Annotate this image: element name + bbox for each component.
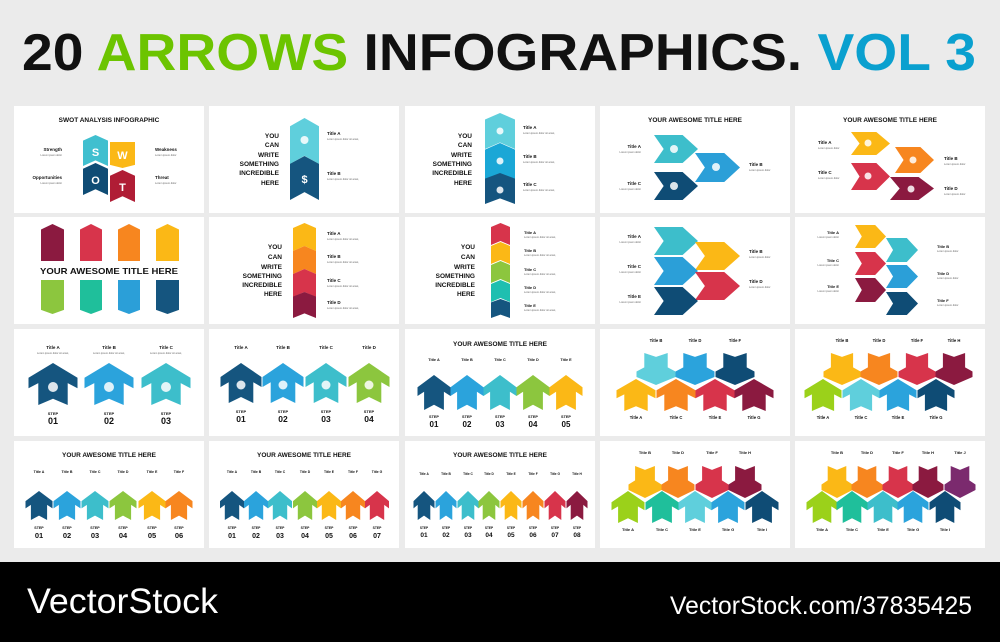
panel: three right arrows: Title B	[749, 162, 763, 167]
panel: eight steps: 07	[551, 532, 559, 539]
panel: zigzag ten: Title I	[940, 527, 950, 532]
panel: five steps: 05	[562, 420, 571, 429]
panel: two vertical arrows: Lorem ipsum dolor sit amet,	[327, 137, 359, 141]
panel: four right arrows: Title A	[818, 140, 832, 145]
panel: five steps: 02	[463, 420, 472, 429]
panel: SWOT: Threat	[155, 175, 169, 180]
panel: five steps: STEP	[429, 415, 439, 419]
panel: five right arrows: Title D	[749, 279, 763, 284]
panel: five right arrows	[600, 217, 790, 324]
panel: five vertical chevrons: Lorem ipsum dolor sit amet,	[524, 308, 556, 312]
panel: zigzag nine: Title B	[639, 450, 651, 455]
panel: three right arrows: Title C	[627, 181, 642, 186]
panel: five vertical chevrons: Title E	[524, 303, 536, 308]
panel: five vertical chevrons: YOU	[461, 244, 475, 251]
panel: seven steps: Title F	[348, 470, 358, 474]
panel: zigzag seven: Title B	[650, 338, 662, 343]
panel: seven steps: STEP	[373, 526, 382, 530]
footer logo: VectorStock	[27, 582, 219, 621]
panel: three right arrows: Title A	[627, 144, 642, 149]
panel: four steps: 02	[278, 414, 288, 424]
panel: five vertical chevrons: Lorem ipsum dolor sit amet,	[524, 235, 556, 239]
panel: four steps: STEP	[364, 409, 375, 414]
panel: three right arrows: Lorem ipsum dolor	[620, 150, 641, 154]
panel: five right arrows: Lorem ipsum dolor	[749, 285, 771, 289]
panel: five steps: STEP	[495, 415, 505, 419]
panel: five vertical chevrons: Lorem ipsum dolor sit amet,	[524, 290, 556, 294]
panel: zigzag eight: Title C	[855, 415, 867, 420]
panel: three vertical arrows: Lorem ipsum dolor sit amet,	[523, 131, 555, 135]
panel: six steps	[14, 441, 204, 548]
panel: eight steps: STEP	[551, 526, 560, 530]
panel: four right arrows: YOUR AWESOME TITLE HERE	[843, 117, 938, 124]
panel: zigzag ten: Title H	[922, 450, 934, 455]
panel: seven steps: STEP	[301, 526, 310, 530]
panel: zigzag nine: Title C	[656, 527, 668, 532]
panel: four right arrows: Title B	[944, 156, 958, 161]
panel: three steps: 02	[104, 416, 114, 426]
panel: zigzag nine: Title H	[739, 450, 751, 455]
panel: four vertical chevrons: HERE	[264, 291, 283, 298]
panel: seven steps: 03	[276, 533, 284, 540]
panel: eight steps: 05	[507, 532, 515, 539]
panel: SWOT: Lorem ipsum dolor	[155, 153, 177, 157]
panel: eight steps: Title C	[463, 472, 474, 476]
panel: five steps: 01	[430, 420, 439, 429]
panel: two vertical arrows: Title B	[327, 171, 341, 176]
panel: three vertical arrows: Lorem ipsum dolor sit amet,	[523, 160, 555, 164]
panel: five vertical chevrons	[405, 217, 595, 324]
panel: three vertical arrows	[405, 106, 595, 213]
panel: six right arrows: Lorem ipsum dolor	[937, 303, 959, 307]
panel: seven steps: 05	[325, 533, 333, 540]
panel: six steps: STEP	[62, 526, 72, 530]
panel: eight steps: 01	[420, 532, 428, 539]
panel: SWOT: Lorem ipsum dolor	[41, 153, 62, 157]
panel: six steps: YOUR AWESOME TITLE HERE	[62, 452, 157, 459]
panel: four right arrows: Lorem ipsum dolor	[944, 192, 966, 196]
panel: zigzag ten: Title A	[816, 527, 828, 532]
panel: six steps: Title F	[174, 470, 185, 474]
title: 20 ARROWS INFOGRAPHICS. VOL 3	[22, 24, 976, 82]
panel: zigzag seven: Title C	[670, 415, 682, 420]
panel: seven steps: Title B	[251, 470, 262, 474]
panel: four right arrows	[795, 106, 985, 213]
panel: zigzag ten: Title C	[846, 527, 858, 532]
panel: six steps: 02	[63, 531, 71, 540]
panel: zigzag ten: Title G	[907, 527, 919, 532]
panel: seven steps: STEP	[349, 526, 358, 530]
panel: three steps: STEP	[48, 411, 59, 416]
panel: five vertical chevrons: Title D	[524, 285, 536, 290]
panel: four steps: STEP	[321, 409, 332, 414]
panel: zigzag eight: Title E	[892, 415, 904, 420]
panel: two vertical arrows: Title A	[327, 131, 341, 136]
panel: zigzag nine: Title E	[689, 527, 701, 532]
panel: eight steps: Title B	[441, 472, 452, 476]
panel: SWOT: W	[117, 150, 128, 162]
panel: eight steps	[405, 441, 595, 548]
panel: five steps: STEP	[462, 415, 472, 419]
panel: four steps: STEP	[236, 409, 247, 414]
panel: zigzag eight: Title A	[817, 415, 829, 420]
panel: zigzag eight: Title D	[873, 338, 885, 343]
panel: four right arrows: Lorem ipsum dolor	[818, 176, 840, 180]
panel: eight steps: STEP	[529, 526, 538, 530]
panel: three vertical arrows: SOMETHING	[433, 161, 472, 168]
panel: four vertical chevrons: Title D	[327, 300, 341, 305]
panel: three vertical arrows: YOU	[458, 133, 472, 140]
panel: SWOT: Opportunities	[32, 175, 62, 180]
panel: seven steps: STEP	[325, 526, 334, 530]
footer bar	[0, 562, 1000, 642]
panel: six right arrows: Title F	[937, 298, 949, 303]
panel: two vertical arrows: Lorem ipsum dolor sit amet,	[327, 177, 359, 181]
panel: seven steps: Title C	[275, 470, 286, 474]
panel: zigzag nine: Title A	[622, 527, 634, 532]
panel: four vertical chevrons	[209, 217, 399, 324]
panel: seven steps	[209, 441, 399, 548]
panel: four vertical chevrons: Title A	[327, 231, 341, 236]
panel: eight tags	[14, 217, 204, 324]
panel: eight steps: Title E	[506, 472, 516, 476]
panel: five vertical chevrons: Lorem ipsum dolor sit amet,	[524, 253, 556, 257]
panel: five vertical chevrons: Title C	[524, 267, 536, 272]
panel: zigzag seven	[600, 329, 790, 436]
panel: seven steps: YOUR AWESOME TITLE HERE	[257, 452, 352, 459]
panel: two vertical arrows: INCREDIBLE	[239, 170, 280, 177]
panel: three right arrows	[600, 106, 790, 213]
panel: zigzag ten	[795, 441, 985, 548]
panel: two vertical arrows: YOU	[265, 133, 279, 140]
panel: zigzag seven: Title D	[689, 338, 701, 343]
panel: eight steps: 03	[464, 532, 472, 539]
panel: four right arrows: Lorem ipsum dolor	[818, 146, 840, 150]
panel: six right arrows: Title B	[937, 244, 949, 249]
panel: zigzag nine: Title D	[672, 450, 684, 455]
panel: two vertical arrows: SOMETHING	[240, 161, 279, 168]
panel: seven steps: STEP	[276, 526, 285, 530]
panel: eight steps: 02	[442, 532, 450, 539]
panel: two vertical arrows: $	[301, 174, 308, 186]
panel: three right arrows: Lorem ipsum dolor	[620, 187, 641, 191]
panel: six steps: Title C	[90, 470, 101, 474]
panel: five steps: 03	[496, 420, 505, 429]
panel: SWOT: Strength	[44, 147, 62, 152]
panel: six steps: Title B	[62, 470, 73, 474]
panel: four vertical chevrons: Lorem ipsum dolor sit amet,	[327, 260, 359, 264]
panel: six right arrows: Lorem ipsum dolor	[818, 263, 839, 267]
panel: three vertical arrows: INCREDIBLE	[432, 170, 473, 177]
panel: five right arrows: Lorem ipsum dolor	[620, 240, 641, 244]
panel: six steps: Title D	[118, 470, 129, 474]
panel: five steps: Title C	[494, 358, 506, 362]
panel: eight steps: 04	[485, 532, 493, 539]
panel: three steps: Lorem ipsum dolor sit amet,	[93, 351, 125, 355]
panel: five steps: 04	[529, 420, 538, 429]
panel: eight steps: STEP	[442, 526, 451, 530]
panel: seven steps: 04	[301, 533, 309, 540]
panel: four steps: Title D	[362, 345, 377, 350]
panel: eight steps: Title G	[550, 472, 560, 476]
panel: two vertical arrows: WRITE	[258, 152, 280, 159]
panel: five vertical chevrons: WRITE	[454, 264, 476, 271]
panel: six right arrows: Lorem ipsum dolor	[818, 235, 839, 239]
panel: six steps: 04	[119, 531, 128, 540]
panel: three steps: Lorem ipsum dolor sit amet,	[37, 351, 69, 355]
panel: four right arrows: Title D	[944, 186, 958, 191]
panel: four steps: 03	[321, 414, 331, 424]
panel: four steps	[209, 329, 399, 436]
panel: five right arrows: Title E	[628, 294, 641, 299]
panel: zigzag eight	[795, 329, 985, 436]
panel: SWOT: Lorem ipsum dolor	[41, 181, 62, 185]
panel: eight steps: STEP	[485, 526, 494, 530]
panel: four vertical chevrons: INCREDIBLE	[242, 282, 283, 289]
panel: four steps: 01	[236, 414, 246, 424]
panel: zigzag ten: Title D	[861, 450, 873, 455]
panel: six right arrows: Title C	[827, 258, 839, 263]
panel: seven steps: 02	[252, 533, 260, 540]
panel: four steps: Title B	[276, 345, 291, 350]
panel: eight steps: STEP	[420, 526, 429, 530]
panel: SWOT: S	[92, 147, 99, 159]
panel: three vertical arrows: Lorem ipsum dolor sit amet,	[523, 188, 555, 192]
panel: six steps: STEP	[174, 526, 184, 530]
panel: SWOT: Weakness	[155, 147, 177, 152]
panel: five steps: Title D	[527, 358, 539, 362]
panel: six right arrows: Title A	[827, 230, 839, 235]
panel: five vertical chevrons: SOMETHING	[436, 273, 475, 280]
panel: four steps: 04	[364, 414, 374, 424]
panel: four right arrows: Lorem ipsum dolor	[944, 162, 966, 166]
panel: zigzag ten: Title J	[954, 450, 966, 455]
panel: five steps: Title E	[560, 358, 572, 362]
panel: five right arrows: Lorem ipsum dolor	[620, 300, 641, 304]
panel: three steps: Title B	[102, 345, 117, 350]
panel: four steps: Title C	[319, 345, 334, 350]
panel: five right arrows: Lorem ipsum dolor	[749, 255, 771, 259]
panel: eight steps: Title F	[528, 472, 538, 476]
panel: zigzag ten: Title B	[831, 450, 843, 455]
panel: seven steps: Title A	[227, 470, 238, 474]
panel: seven steps: Title D	[300, 470, 311, 474]
panel: three steps: 03	[161, 416, 171, 426]
panel: five right arrows: Title B	[749, 249, 763, 254]
panel: three vertical arrows: HERE	[454, 180, 473, 187]
panel: four steps: Title A	[234, 345, 248, 350]
panel: eight tags: YOUR AWESOME TITLE HERE	[40, 266, 178, 276]
panel: eight steps: Title H	[572, 472, 583, 476]
panel: six steps: 01	[35, 531, 43, 540]
panel: SWOT: O	[91, 175, 100, 187]
panel: three vertical arrows: CAN	[458, 142, 472, 149]
panel: four vertical chevrons: Title C	[327, 278, 341, 283]
panel: seven steps: 01	[228, 533, 236, 540]
panel: six right arrows: Lorem ipsum dolor	[937, 276, 959, 280]
panel: six steps: 06	[175, 531, 183, 540]
panel: eight steps: STEP	[464, 526, 473, 530]
panel: three vertical arrows: Title B	[523, 154, 537, 159]
footer url: VectorStock.com/37835425	[670, 592, 972, 620]
panel: five vertical chevrons: INCREDIBLE	[435, 282, 476, 289]
panel: seven steps: 06	[349, 533, 357, 540]
panel: two vertical arrows: CAN	[265, 142, 279, 149]
panel: zigzag ten: Title F	[892, 450, 904, 455]
panel: SWOT: T	[119, 182, 126, 194]
panel: six right arrows: Title D	[937, 271, 949, 276]
panel: two vertical arrows	[209, 106, 399, 213]
panel: three vertical arrows: Title C	[523, 182, 537, 187]
panel: two vertical arrows: HERE	[261, 180, 280, 187]
panel: eight steps: STEP	[573, 526, 582, 530]
panel: zigzag seven: Title F	[729, 338, 742, 343]
panel: eight steps: YOUR AWESOME TITLE HERE	[453, 452, 548, 459]
panel: three vertical arrows: WRITE	[451, 152, 473, 159]
panel: four steps: STEP	[278, 409, 289, 414]
panel: four vertical chevrons: CAN	[268, 254, 282, 261]
panel: six steps: Title A	[34, 470, 45, 474]
panel: zigzag nine: Title I	[757, 527, 767, 532]
panel: five steps: STEP	[561, 415, 571, 419]
panel: eight steps: 06	[529, 532, 537, 539]
panel: six steps: STEP	[147, 526, 157, 530]
panel: eight steps: STEP	[507, 526, 516, 530]
panel: zigzag nine: Title F	[706, 450, 718, 455]
panel: four vertical chevrons: Title B	[327, 254, 341, 259]
panel: five steps: YOUR AWESOME TITLE HERE	[453, 341, 548, 348]
panel: four vertical chevrons: Lorem ipsum dolor sit amet,	[327, 306, 359, 310]
panel: three steps: Title A	[46, 345, 60, 350]
panel: eight steps: 08	[573, 532, 581, 539]
panel: six right arrows: Lorem ipsum dolor	[937, 249, 959, 253]
panel: eight steps: Title A	[419, 472, 429, 476]
panel: six steps: STEP	[90, 526, 100, 530]
panel: zigzag nine	[600, 441, 790, 548]
panel: four vertical chevrons: Lorem ipsum dolor sit amet,	[327, 284, 359, 288]
panel: five right arrows: Title C	[627, 264, 642, 269]
panel: zigzag eight: Title G	[930, 415, 942, 420]
panel: SWOT: Lorem ipsum dolor	[155, 181, 177, 185]
panel: four right arrows: Title C	[818, 170, 832, 175]
panel: five steps: Title B	[461, 358, 473, 362]
panel: seven steps: STEP	[252, 526, 261, 530]
panel: five right arrows: Title A	[627, 234, 642, 239]
panel: five vertical chevrons: Title B	[524, 248, 536, 253]
panel: four vertical chevrons: Lorem ipsum dolor sit amet,	[327, 237, 359, 241]
panel: SWOT: SWOT ANALYSIS INFOGRAPHIC	[59, 117, 160, 124]
panel: three steps: Lorem ipsum dolor sit amet,	[150, 351, 182, 355]
panel: zigzag ten: Title E	[877, 527, 889, 532]
panel: zigzag eight: Title H	[948, 338, 960, 343]
panel: four vertical chevrons: WRITE	[261, 264, 283, 271]
panel: zigzag seven: Title E	[709, 415, 721, 420]
panel: six right arrows: Title E	[827, 284, 839, 289]
panel: three steps: STEP	[104, 411, 115, 416]
panel: six steps: 03	[91, 531, 99, 540]
panel: zigzag seven: Title G	[748, 415, 760, 420]
panel: eight steps: Title D	[484, 472, 495, 476]
panel: seven steps: STEP	[228, 526, 237, 530]
panel: seven steps: Title E	[324, 470, 335, 474]
panel: zigzag seven: Title A	[630, 415, 642, 420]
panel: six right arrows	[795, 217, 985, 324]
panel: five steps	[405, 329, 595, 436]
panel: three steps: Title C	[159, 345, 174, 350]
panel: five steps: STEP	[528, 415, 538, 419]
panel: four vertical chevrons: SOMETHING	[243, 273, 282, 280]
panel: six right arrows: Lorem ipsum dolor	[818, 289, 839, 293]
panel: five right arrows: Lorem ipsum dolor	[620, 270, 641, 274]
panel: three right arrows: Lorem ipsum dolor	[749, 168, 771, 172]
panel: five vertical chevrons: Lorem ipsum dolor sit amet,	[524, 272, 556, 276]
panel: three steps: 01	[48, 416, 58, 426]
panel: six steps: STEP	[118, 526, 128, 530]
panel: zigzag nine: Title G	[722, 527, 734, 532]
panel: five steps: Title A	[428, 358, 440, 362]
panel: six steps: 05	[148, 531, 156, 540]
panel: seven steps: 07	[373, 533, 381, 540]
panel: zigzag eight: Title B	[836, 338, 848, 343]
panel: seven steps: Title G	[372, 470, 383, 474]
panel: three steps: STEP	[161, 411, 172, 416]
panel: three steps	[14, 329, 204, 436]
panel: four vertical chevrons: YOU	[268, 244, 282, 251]
panel: five vertical chevrons: Title A	[524, 230, 536, 235]
panel: six steps: STEP	[34, 526, 44, 530]
panel: SWOT	[14, 106, 204, 213]
panel: three right arrows: YOUR AWESOME TITLE HERE	[648, 117, 743, 124]
panel: three vertical arrows: Title A	[523, 125, 537, 130]
panel: five vertical chevrons: CAN	[461, 254, 475, 261]
panel: zigzag eight: Title F	[911, 338, 924, 343]
panel: six steps: Title E	[147, 470, 158, 474]
panel: five vertical chevrons: HERE	[457, 291, 476, 298]
